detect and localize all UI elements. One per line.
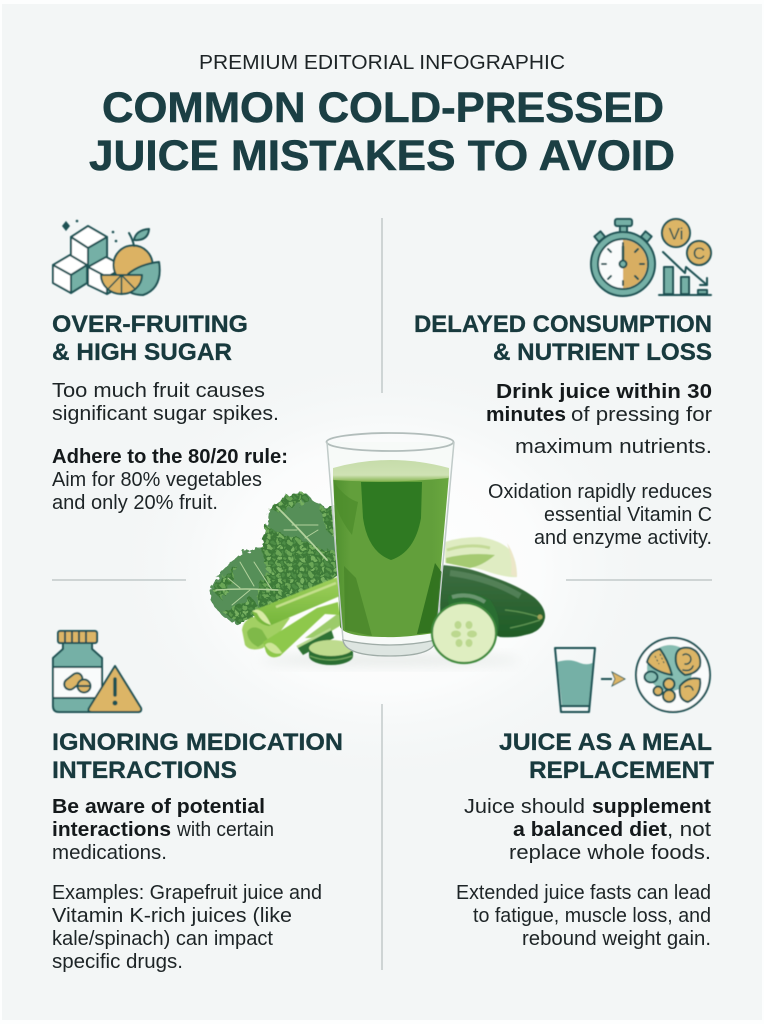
header [89,52,675,180]
body text: Be aware of potential [52,795,265,818]
icon: juice versus plate of food [555,638,710,712]
title [89,84,675,180]
heading: JUICE AS A MEAL [499,729,712,756]
body text: Drink juice within 30 [496,380,712,403]
body text: Adhere to the 80/20 rule: [52,445,288,468]
cucumber slice large [432,593,499,663]
heading [414,311,712,366]
cucumber [440,565,545,637]
kale [209,492,338,624]
heading: DELAYED CONSUMPTION [414,311,712,338]
leaf veins [216,507,327,605]
icon: stopwatch and falling vitamins: Vi [669,224,683,244]
heading: IGNORING MEDICATION [52,729,343,756]
body text: to fatigue, muscle loss, and [473,904,711,927]
title: COMMON COLD-PRESSED [102,84,664,132]
body text: significant sugar spikes. [52,402,279,425]
body text: Juice should [464,795,585,818]
body text: Vitamin K-rich juices (like [52,904,292,927]
body text: of pressing for [571,403,712,426]
body text: rebound weight gain. [522,927,711,950]
body text: Too much fruit causes [52,379,265,402]
curly centre [212,492,338,624]
heading: & HIGH SUGAR [52,339,232,366]
body text: , not [667,818,711,841]
icon: stopwatch and falling vitamins: C [693,244,705,263]
heading: REPLACEMENT [529,757,714,784]
fennel [445,537,517,577]
body text [456,795,711,950]
panel: over-fruiting [52,311,288,514]
body text: maximum nutrients. [515,435,712,458]
eyebrow: PREMIUM EDITORIAL INFOGRAPHIC [199,52,565,74]
body text [52,379,288,514]
heading: OVER-FRUITING [52,311,248,338]
panel: meal replacement [456,729,714,950]
celery [242,577,343,657]
body text: supplement [592,795,711,818]
central juice illustration [209,433,545,666]
body text: replace whole foods. [509,841,711,864]
body text: kale/spinach) can impact [52,927,273,950]
body text: a balanced diet [513,818,667,841]
body text: Examples: Grapefruit juice and [52,881,322,904]
body text: and enzyme activity. [534,526,712,549]
cucumber slices small [297,629,353,665]
glass of green juice [326,433,454,657]
panel: delayed consumption [414,311,712,549]
body text: interactions [52,818,171,841]
body text [486,380,712,549]
body text: minutes [486,403,566,426]
body text: Aim for 80% vegetables [52,468,262,491]
leaf base [209,492,338,624]
heading [52,729,343,784]
heading [52,311,248,366]
body text: Oxidation rapidly reduces [488,480,712,503]
body text: and only 20% fruit. [52,491,218,514]
title: JUICE MISTAKES TO AVOID [89,132,675,180]
icon: stopwatch and falling vitamins [591,219,711,296]
heading [499,729,714,784]
icon: medication and warning [53,631,141,712]
body text: with certain [176,818,274,841]
body text: specific drugs. [52,950,183,973]
heading: & NUTRIENT LOSS [493,339,712,366]
panel: medication interactions [52,729,343,973]
body text: essential Vitamin C [544,503,712,526]
body text [52,795,322,973]
body text: medications. [52,841,167,864]
icon: sugar cubes and citrus [53,220,160,295]
body text: Extended juice fasts can lead [456,881,711,904]
heading: INTERACTIONS [52,757,237,784]
